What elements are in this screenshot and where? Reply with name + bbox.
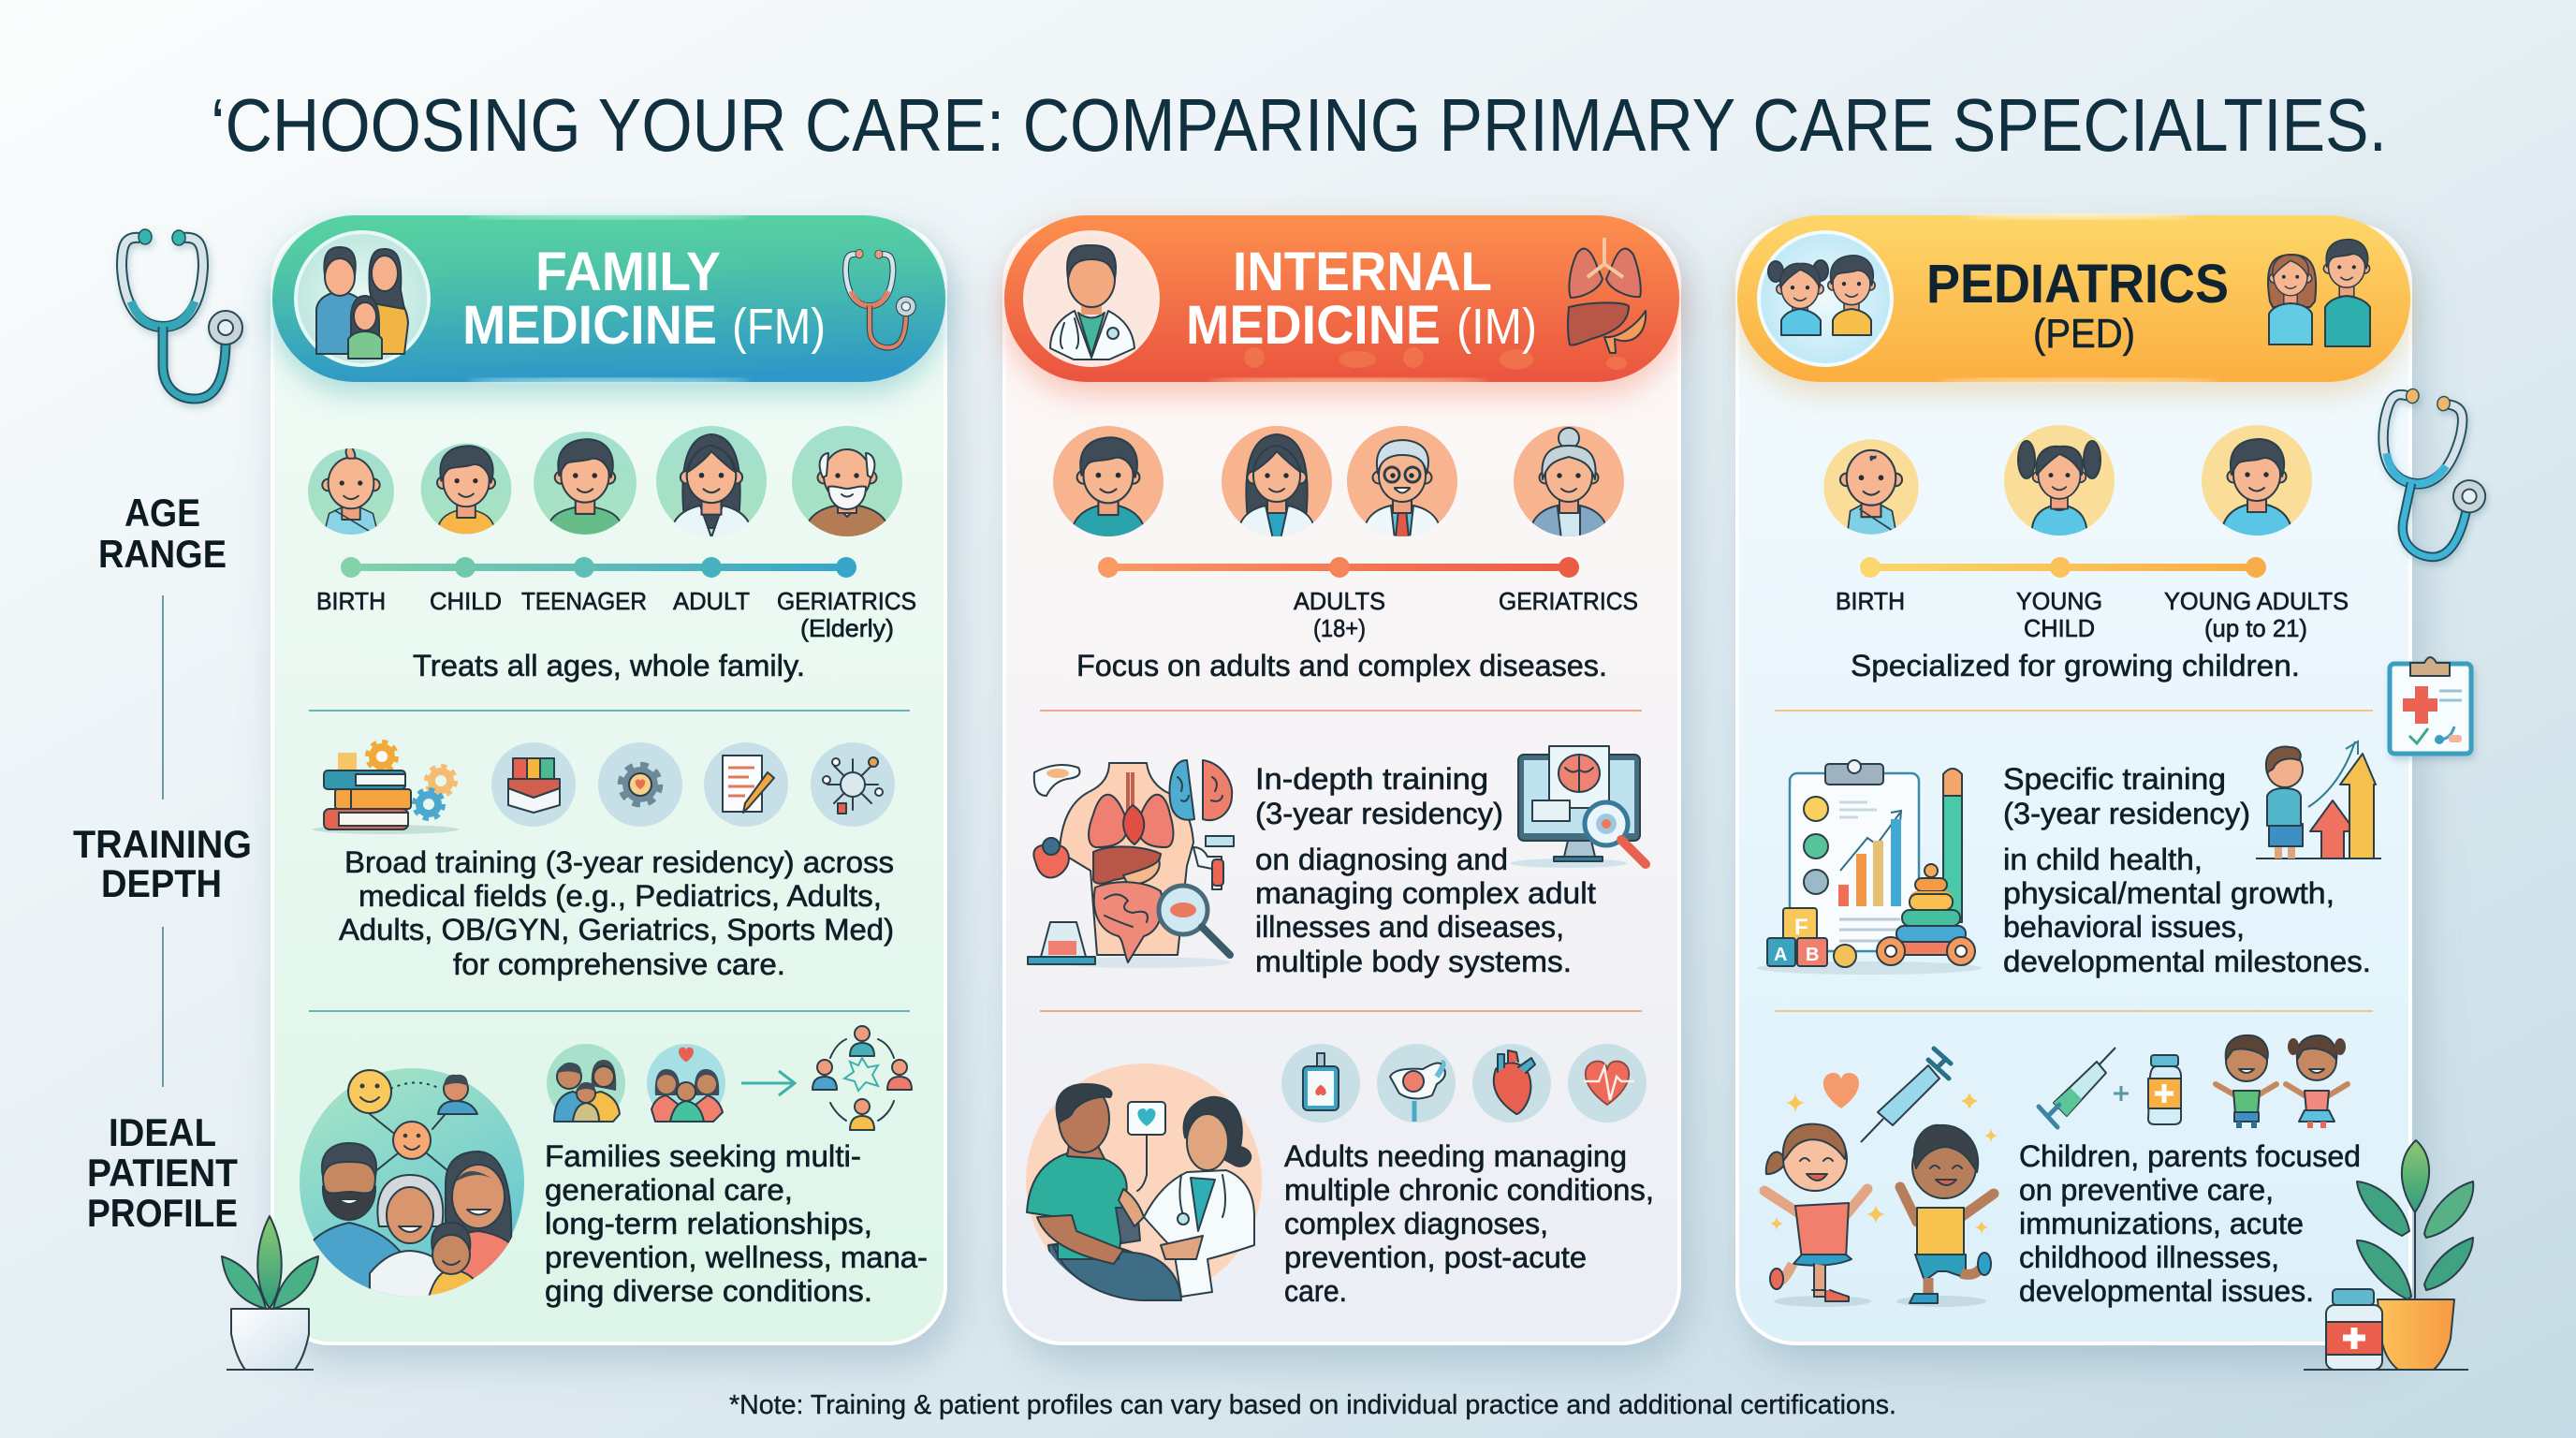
training text: medical fields (e.g., Pediatrics, Adults, — [359, 879, 882, 913]
training text: managing complex adult — [1255, 876, 1596, 910]
row label: age range: RANGE — [98, 532, 227, 576]
decoration: potted plant left — [222, 1216, 318, 1370]
training text: (3-year residency) — [2003, 797, 2250, 830]
profile text — [1284, 1139, 1654, 1308]
illustration: doctor and patient — [1026, 1064, 1262, 1306]
profile text — [2019, 1139, 2361, 1308]
icons: vaccine and children — [2039, 1035, 2348, 1128]
heading text — [1186, 242, 1537, 356]
profile text: multiple chronic conditions, — [1284, 1173, 1654, 1207]
row label: age range — [98, 491, 227, 576]
profile text: on preventive care, — [2019, 1173, 2274, 1207]
timeline labels: TEENAGER — [521, 587, 647, 615]
decoration: potted plant and medicine bottle right — [2304, 1140, 2473, 1370]
training text — [1255, 762, 1596, 978]
header: family medicine — [272, 213, 945, 384]
training text: for comprehensive care. — [453, 947, 785, 981]
avatar: child — [421, 444, 511, 536]
age range summary: Treats all ages, whole family. — [413, 649, 805, 682]
panel: pediatrics — [1737, 213, 2410, 1343]
arrow — [741, 1071, 795, 1095]
profile text: ging diverse conditions. — [545, 1274, 872, 1308]
timeline labels — [316, 587, 916, 642]
avatar: teenager — [534, 432, 637, 537]
heading text: (FM) — [732, 299, 826, 355]
training text: on diagnosing and — [1255, 843, 1508, 876]
timeline: age range — [341, 557, 856, 578]
heading text: INTERNAL — [1233, 242, 1492, 302]
heading text — [462, 242, 826, 356]
icon: document and pencil — [704, 742, 788, 827]
timeline labels: CHILD — [430, 587, 502, 615]
avatars: pediatric age groups — [1823, 425, 2312, 538]
timeline labels: BIRTH — [316, 587, 386, 615]
row label: age range: AGE — [124, 491, 200, 535]
timeline: age range — [1860, 557, 2266, 578]
panel: family medicine — [272, 213, 945, 1343]
training text: developmental milestones. — [2003, 945, 2371, 978]
icon: heart organ — [1472, 1044, 1551, 1123]
card background — [1004, 225, 1679, 1343]
icon: family with heart — [647, 1044, 725, 1123]
avatar: older male doctor — [1347, 426, 1457, 539]
illustration: growth chart and toys — [1757, 760, 1982, 975]
heading text: MEDICINE — [1186, 295, 1441, 356]
training text: Specific training — [2003, 762, 2226, 796]
icon: glucose meter — [1281, 1044, 1360, 1123]
row label: training depth: TRAINING — [73, 822, 252, 866]
illustration: multi-generational family — [300, 1068, 524, 1311]
icon: books and gears — [313, 742, 459, 834]
avatar: adult — [656, 426, 767, 539]
panel: internal medicine — [1004, 215, 1679, 1343]
profile text: complex diagnoses, — [1284, 1207, 1548, 1240]
profile text: care. — [1284, 1274, 1347, 1308]
icon: kidney organ — [1377, 1044, 1456, 1123]
profile text: immunizations, acute — [2019, 1207, 2304, 1240]
icon: doctor portrait — [1025, 232, 1158, 365]
icon: gear heart — [598, 742, 682, 827]
profile text: Families seeking multi- — [545, 1139, 861, 1173]
avatar: young child — [2004, 425, 2115, 538]
timeline labels: GERIATRICS — [777, 587, 916, 615]
heading text: MEDICINE — [462, 295, 717, 356]
illustration: growth chart and toys: B — [1806, 945, 1819, 965]
icons: chronic condition circles — [1281, 1044, 1647, 1123]
training text: In-depth training — [1255, 762, 1488, 796]
training text: Broad training (3-year residency) across — [344, 845, 894, 879]
avatar: birth — [308, 444, 394, 536]
timeline: age range — [1098, 557, 1579, 578]
icon: boy cheering — [2216, 1035, 2276, 1128]
profile text — [545, 1139, 928, 1308]
illustration: growth chart and toys: A — [1774, 945, 1787, 965]
row label: ideal patient profile: PROFILE — [87, 1191, 238, 1235]
training text: Adults, OB/GYN, Geriatrics, Sports Med) — [339, 913, 894, 946]
profile text: childhood illnesses, — [2019, 1240, 2279, 1274]
row label: ideal patient profile: PATIENT — [87, 1151, 238, 1195]
timeline labels: (18+) — [1313, 614, 1366, 642]
header: pediatrics — [1737, 213, 2410, 384]
training text: (3-year residency) — [1255, 797, 1503, 830]
timeline labels: (up to 21) — [2204, 614, 2307, 642]
icon: stethoscope left — [122, 229, 242, 399]
age range summary: Focus on adults and complex diseases. — [1076, 649, 1607, 682]
icon: network — [811, 742, 895, 827]
icon circles: training — [491, 742, 895, 827]
row label: ideal patient profile — [87, 1110, 238, 1235]
footnote: *Note: Training & patient profiles can vary based on individual practice and additional certifications. — [729, 1390, 1896, 1420]
avatar: birth — [1823, 439, 1919, 536]
row label: training depth: DEPTH — [101, 861, 222, 905]
heading text: (IM) — [1456, 299, 1537, 355]
training text — [339, 845, 894, 981]
avatars: age groups — [308, 426, 902, 539]
profile text: generational care, — [545, 1173, 793, 1207]
illustration: growth chart and toys: F — [1794, 915, 1808, 940]
timeline labels — [1836, 587, 2349, 642]
heading text — [1926, 254, 2229, 357]
icon: care network — [812, 1026, 912, 1130]
timeline labels: CHILD — [2024, 614, 2095, 642]
avatar: older woman — [1514, 426, 1624, 539]
icon: children portrait — [1759, 232, 1892, 365]
card background — [1737, 225, 2410, 1343]
timeline labels: YOUNG ADULTS — [2164, 587, 2349, 615]
icon: family portrait — [296, 232, 429, 365]
profile text: prevention, wellness, mana- — [545, 1240, 928, 1274]
timeline labels: GERIATRICS — [1499, 587, 1638, 615]
icon: book stack — [491, 742, 576, 827]
profile text: long-term relationships, — [545, 1207, 872, 1240]
timeline labels: YOUNG — [2016, 587, 2102, 615]
icon: girl cheering — [2286, 1035, 2348, 1128]
card background — [272, 225, 945, 1343]
icon: family circle — [547, 1044, 625, 1123]
icon: stethoscope — [845, 249, 915, 347]
icon: lungs and liver — [1568, 238, 1646, 353]
profile text: developmental issues. — [2019, 1274, 2314, 1308]
training text: in child health, — [2003, 843, 2203, 876]
icon: monitor with brain scan — [1511, 746, 1646, 868]
heading text: FAMILY — [535, 242, 721, 302]
profile text: prevention, post-acute — [1284, 1240, 1587, 1274]
illustration: happy children and syringe — [1764, 1049, 1998, 1307]
illustration: body systems anatomy — [1028, 760, 1234, 968]
avatar: female doctor — [1222, 426, 1332, 539]
icon: clipboard checklist — [2390, 657, 2471, 754]
timeline labels: BIRTH — [1836, 587, 1905, 615]
heading text: PEDIATRICS — [1926, 254, 2229, 315]
training text — [2003, 762, 2371, 978]
training text: multiple body systems. — [1255, 945, 1572, 978]
training text: physical/mental growth, — [2003, 876, 2334, 910]
training text: behavioral issues, — [2003, 910, 2245, 944]
avatars: adult groups — [1053, 426, 1624, 539]
avatar: geriatrics — [792, 426, 902, 539]
row label: training depth — [73, 822, 252, 905]
avatar: young adult — [1053, 426, 1164, 539]
timeline labels — [1294, 587, 1638, 642]
profile text: Children, parents focused — [2019, 1139, 2361, 1173]
icon: heartbeat — [1568, 1044, 1647, 1123]
header: internal medicine — [1004, 215, 1679, 384]
heading text: (PED) — [2033, 311, 2135, 357]
icon: stethoscope right — [2359, 385, 2505, 565]
profile text: Adults needing managing — [1284, 1139, 1627, 1173]
row label: ideal patient profile: IDEAL — [109, 1110, 216, 1154]
age range summary: Specialized for growing children. — [1851, 649, 2300, 682]
icon: two children — [2268, 240, 2370, 346]
avatar: young adult — [2202, 425, 2312, 538]
timeline labels: ADULTS — [1294, 587, 1385, 615]
timeline labels: ADULT — [673, 587, 750, 615]
timeline labels: (Elderly) — [800, 614, 894, 642]
icon: child with growth arrows — [2256, 741, 2381, 858]
training text: illnesses and diseases, — [1255, 910, 1564, 944]
